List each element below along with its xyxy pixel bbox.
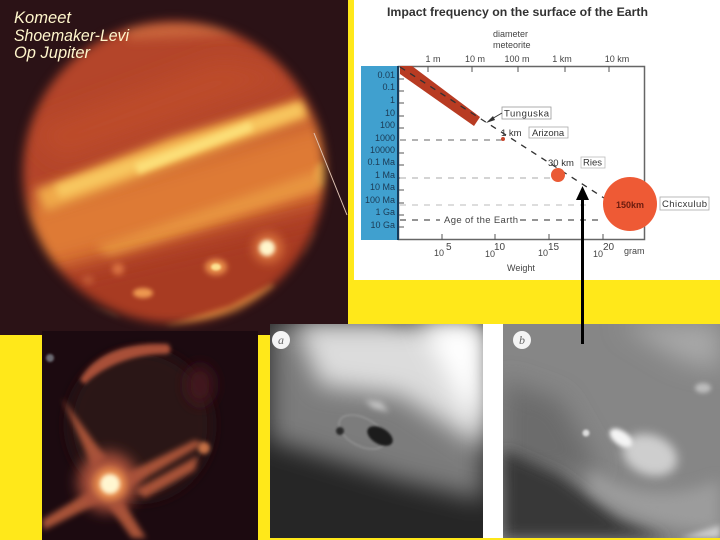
panel letter b: b bbox=[519, 333, 525, 347]
top limb glow bbox=[124, 20, 232, 42]
blue frequency scale bbox=[361, 66, 398, 240]
Chicxulub impact bbox=[603, 177, 709, 231]
moon spots bbox=[198, 442, 210, 454]
weight axis labels: 10 bbox=[485, 249, 495, 259]
top axis ticks bbox=[399, 66, 609, 240]
bottom arc bbox=[165, 284, 277, 330]
red frequency band bbox=[400, 66, 480, 126]
impact spots bbox=[253, 233, 283, 263]
streak bbox=[314, 133, 347, 215]
dark lower-left limb bbox=[503, 450, 670, 538]
frequency scale labels: 1 bbox=[390, 95, 395, 105]
Tunguska label bbox=[486, 107, 551, 123]
dashed impact trend line bbox=[400, 67, 604, 198]
flare rays bbox=[42, 398, 203, 538]
weight axis labels: 20 bbox=[603, 242, 615, 253]
frequency scale labels: 0.01 bbox=[377, 70, 395, 80]
panel: photo b, bright impact flash bbox=[503, 324, 720, 538]
weight axis labels: 15 bbox=[548, 242, 560, 253]
bright limb arc bbox=[80, 344, 171, 384]
frequency scale labels: 1 Ma bbox=[375, 170, 395, 180]
top axis labels: 1 km bbox=[552, 54, 572, 64]
axis title: diameter meteorite: diameter bbox=[493, 29, 528, 39]
panel: impact frequency chart bbox=[354, 0, 720, 280]
panel letter a bbox=[272, 331, 290, 349]
Arizona label: Arizona bbox=[532, 128, 565, 139]
panel: photo a, dark impact scar bbox=[270, 324, 483, 538]
dashed reference lines bbox=[400, 140, 604, 220]
title: Komeet Shoemaker-Levi op Jupiter: Shoemaker-Levi bbox=[14, 26, 130, 45]
dim planet disc bbox=[68, 350, 212, 500]
frequency scale labels: 1 Ga bbox=[375, 207, 395, 217]
frequency scale labels: 100 bbox=[380, 120, 395, 130]
chart heading: Impact frequency on the surface of the Earth bbox=[387, 7, 648, 19]
Tunguska label: Tunguska bbox=[504, 108, 550, 120]
Chicxulub impact: Chicxulub bbox=[662, 199, 707, 210]
axis title: diameter meteorite bbox=[493, 29, 531, 50]
upper light haze bbox=[620, 324, 720, 370]
label: Age of the Earth: Age of the Earth bbox=[444, 215, 518, 226]
Arizona label: 1 km bbox=[501, 128, 522, 139]
lower dark belt bbox=[62, 222, 310, 320]
panel: comet impact flare photo bbox=[42, 331, 258, 540]
plot frame bbox=[398, 66, 644, 240]
mid grey zone bbox=[270, 324, 483, 500]
weight axis labels: 10 bbox=[434, 248, 444, 258]
axis title: diameter meteorite: meteorite bbox=[493, 40, 531, 50]
orange broad band bbox=[24, 115, 328, 273]
top axis labels bbox=[425, 54, 629, 64]
top axis labels: 10 m bbox=[465, 54, 485, 64]
weight axis labels: gram bbox=[624, 246, 645, 256]
bright plume bbox=[590, 470, 720, 530]
bright band bbox=[35, 98, 310, 212]
frequency scale labels: 100 Ma bbox=[365, 195, 395, 205]
frequency scale labels: 10 bbox=[385, 108, 395, 118]
upper cloud zone bbox=[295, 324, 483, 450]
Ries label: Ries bbox=[583, 158, 602, 168]
Arizona label bbox=[501, 127, 568, 141]
panel: Jupiter infrared photo bbox=[0, 0, 348, 335]
weight axis labels bbox=[434, 242, 645, 273]
panel letter a: a bbox=[278, 333, 284, 347]
frequency scale labels: 0.1 Ma bbox=[367, 157, 395, 167]
Ries label bbox=[548, 157, 605, 182]
frequency scale labels bbox=[365, 70, 395, 230]
top axis labels: 1 m bbox=[425, 54, 441, 64]
Ries label: 30 km bbox=[548, 158, 574, 169]
mid-left shade bbox=[503, 380, 600, 480]
weight axis labels: 10 bbox=[593, 249, 603, 259]
arrow: up to chart bbox=[576, 186, 589, 344]
frequency scale labels: 0.1 bbox=[382, 82, 395, 92]
title: Komeet Shoemaker-Levi op Jupiter: Op Jupiter bbox=[14, 43, 91, 62]
weight axis labels: 10 bbox=[538, 248, 548, 258]
title: Komeet Shoemaker-Levi op Jupiter: Komeet bbox=[14, 8, 72, 27]
right limb spot bbox=[315, 162, 329, 186]
top axis labels: 100 m bbox=[504, 54, 530, 64]
frequency scale labels: 10 Ga bbox=[370, 220, 395, 230]
frequency scale labels: 10000 bbox=[370, 145, 395, 155]
frequency scale labels: 10 Ma bbox=[370, 182, 395, 192]
weight axis labels: Weight bbox=[507, 263, 535, 273]
Chicxulub impact: 150km bbox=[616, 200, 644, 210]
title: Komeet Shoemaker-Levi op Jupiter bbox=[14, 8, 130, 62]
frequency scale labels: 1000 bbox=[375, 133, 395, 143]
top axis labels: 10 km bbox=[605, 54, 629, 64]
weight axis labels: 10 bbox=[494, 242, 506, 253]
lower band bbox=[95, 170, 325, 258]
impact scar bbox=[335, 398, 394, 450]
white divider strip bbox=[483, 324, 503, 538]
weight axis labels: 5 bbox=[446, 242, 452, 253]
panel letter b bbox=[513, 331, 531, 349]
